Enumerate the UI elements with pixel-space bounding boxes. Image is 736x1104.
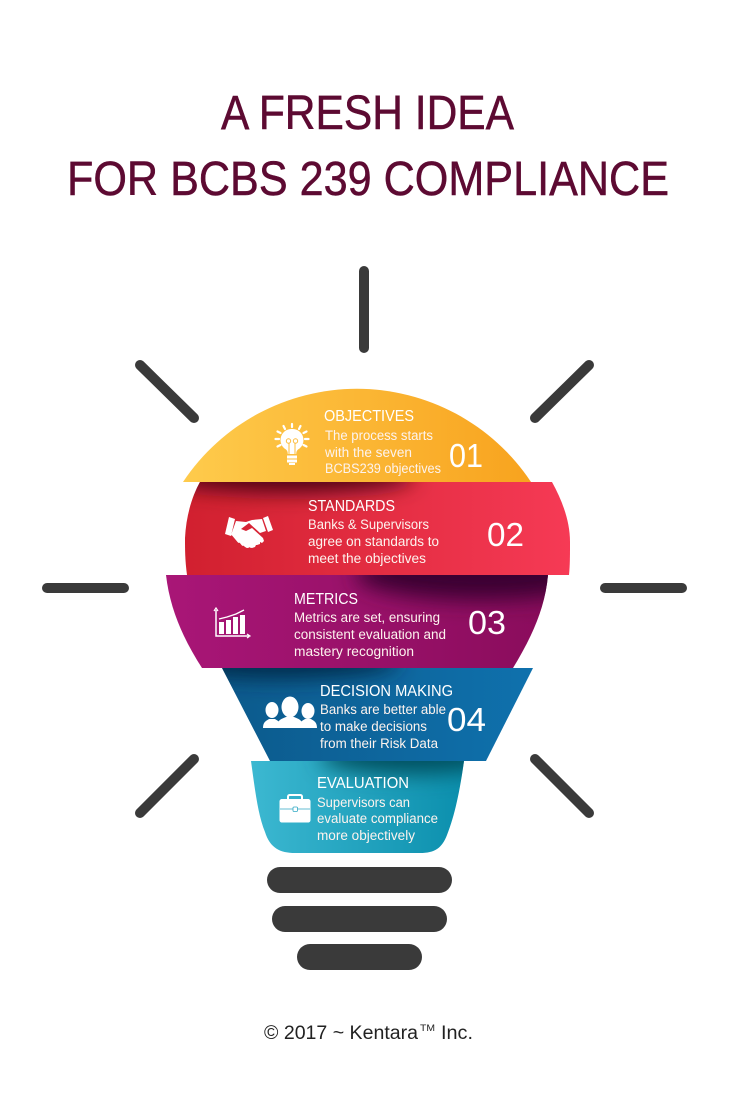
evaluation text: more objectively — [317, 828, 415, 843]
title: FOR BCBS 239 COMPLIANCE — [67, 153, 669, 206]
evaluation text: EVALUATION — [317, 775, 409, 792]
standards text: Banks & Supervisors — [308, 517, 429, 532]
footer copyright: Inc. — [441, 1023, 473, 1044]
objectives text — [324, 408, 441, 476]
standards text: STANDARDS — [308, 498, 395, 515]
metrics text: METRICS — [294, 591, 358, 608]
panel: objectives — [183, 389, 531, 482]
standards text: meet the objectives — [308, 551, 426, 566]
panel: evaluation — [251, 761, 464, 853]
evaluation text: Supervisors can — [317, 795, 410, 810]
objectives text: with the seven — [324, 445, 412, 460]
icon: handshake — [225, 516, 273, 548]
decision making text: Banks are better able — [320, 702, 446, 717]
icon: light bulb — [276, 424, 308, 465]
standards text — [308, 498, 439, 566]
footer copyright: TM — [420, 1023, 435, 1033]
objectives text: The process starts — [325, 428, 433, 443]
standards text: agree on standards to — [308, 534, 439, 549]
number 03: 03 — [468, 604, 506, 641]
number 04: 04 — [447, 701, 486, 738]
bulb base — [267, 867, 452, 970]
evaluation text — [317, 775, 438, 843]
light rays — [47, 271, 682, 813]
objectives text: OBJECTIVES — [324, 408, 414, 425]
evaluation text: evaluate compliance — [317, 811, 438, 826]
footer copyright: © 2017 ~ Kentara — [264, 1023, 418, 1044]
metrics text: Metrics are set, ensuring — [294, 610, 440, 625]
decision making text: from their Risk Data — [320, 736, 438, 751]
objectives text: BCBS239 objectives — [325, 461, 441, 476]
decision making text: DECISION MAKING — [320, 683, 453, 700]
decision making text — [320, 683, 453, 751]
number 02: 02 — [487, 516, 524, 553]
icon: briefcase — [280, 794, 310, 822]
metrics text: consistent evaluation and — [294, 627, 446, 642]
title — [67, 87, 669, 206]
number 01: 01 — [449, 437, 483, 474]
panel: standards — [185, 482, 570, 575]
title: A FRESH IDEA — [221, 87, 514, 140]
metrics text: mastery recognition — [294, 644, 414, 659]
metrics text — [294, 591, 446, 659]
decision making text: to make decisions — [320, 719, 427, 734]
panel: metrics — [166, 575, 548, 668]
icon: bar chart — [214, 608, 250, 638]
panel: decision making — [222, 668, 533, 761]
icon: people — [263, 696, 317, 728]
